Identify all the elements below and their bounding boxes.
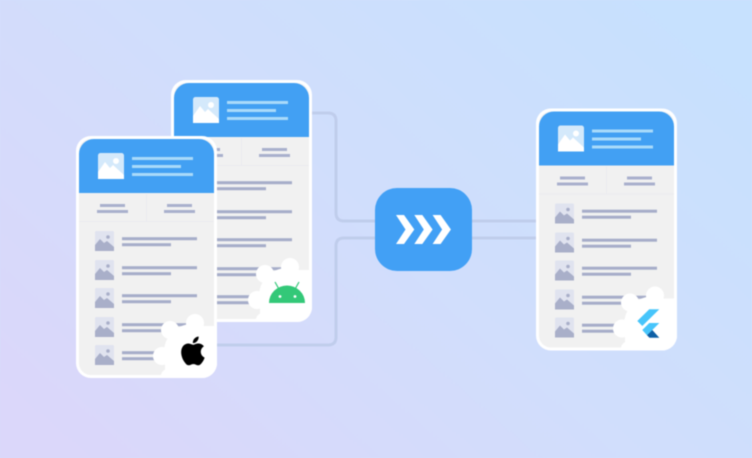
panel: ios app card — [76, 136, 227, 386]
gear badge — [612, 286, 674, 348]
gear badge — [248, 258, 309, 319]
arrow button — [375, 188, 472, 271]
connector: button to flutter card bottom — [472, 236, 536, 240]
list row 3 — [190, 232, 292, 252]
list row 3 — [95, 288, 197, 308]
header text lines — [227, 101, 288, 120]
connector: apple card to button — [217, 238, 376, 345]
list row 5 — [95, 345, 197, 365]
list row 2 — [190, 204, 292, 224]
icon: flutter — [637, 309, 659, 338]
header text lines — [132, 157, 193, 176]
connector: android card to button — [312, 113, 376, 221]
stat right — [624, 176, 655, 186]
icon: apple — [181, 336, 205, 365]
panel: android app card — [171, 80, 322, 330]
list row 5 — [190, 289, 292, 309]
icon: triple chevron arrows — [396, 215, 451, 244]
stat left — [97, 204, 128, 213]
gear badge — [152, 314, 214, 375]
panel: flutter app card — [536, 108, 687, 358]
stat right — [259, 148, 290, 157]
list row 4 — [555, 290, 657, 310]
list row 4 — [95, 317, 197, 337]
stat left — [557, 176, 588, 186]
connector: button to flutter card top — [472, 220, 536, 222]
header text lines — [592, 130, 653, 148]
stat right — [164, 204, 195, 213]
header image icon — [193, 97, 219, 123]
list row 3 — [555, 260, 657, 280]
list row 4 — [190, 261, 292, 281]
header image icon — [558, 126, 584, 152]
list row 1 — [555, 204, 657, 224]
icon: android — [269, 282, 305, 303]
list row 5 — [555, 318, 657, 338]
list row 1 — [190, 175, 292, 195]
stat left — [192, 148, 223, 157]
list row 2 — [95, 260, 197, 280]
header image icon — [98, 153, 124, 179]
list row 1 — [95, 231, 197, 251]
list row 2 — [555, 232, 657, 252]
